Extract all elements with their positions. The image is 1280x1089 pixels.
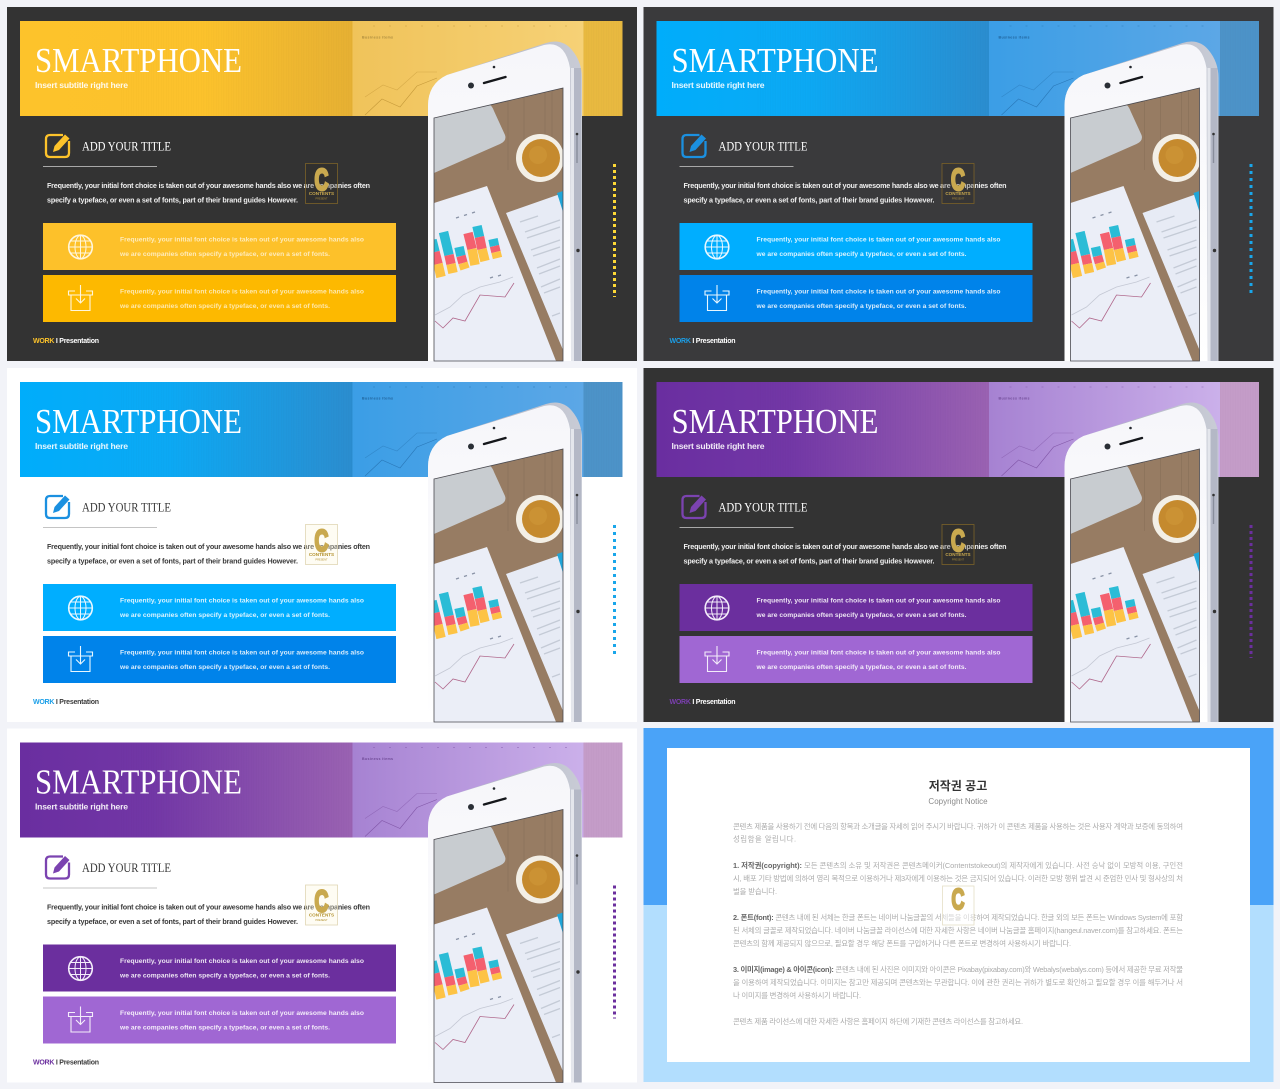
dotted line xyxy=(613,525,616,658)
title: SMARTPHONE xyxy=(35,762,242,802)
card 2 xyxy=(43,275,396,322)
watermark: PRESENT xyxy=(315,558,328,562)
watermark xyxy=(306,524,338,564)
icon: edit xyxy=(682,496,706,518)
card 2: we are companies often specify a typeface, or even a set of fonts. xyxy=(119,664,330,671)
phone xyxy=(425,403,582,722)
card 1: we are companies often specify a typeface, or even a set of fonts. xyxy=(756,612,967,619)
watermark: PRESENT xyxy=(952,558,965,562)
body paragraph: Frequently, your initial font choice is taken out of your awesome hands also we are companies often xyxy=(47,902,370,912)
body paragraph xyxy=(47,542,370,566)
card 2: Frequently, your initial font choice is taken out of your awesome hands also xyxy=(120,650,364,656)
icon: edit xyxy=(46,496,70,518)
card 2: Frequently, your initial font choice is taken out of your awesome hands also xyxy=(120,288,364,296)
body paragraph xyxy=(684,181,1006,204)
card 1: we are companies often specify a typeface, or even a set of fonts. xyxy=(119,251,330,258)
notice subtitle: Copyright Notice xyxy=(928,797,988,806)
subtitle: Insert subtitle right here xyxy=(672,441,765,451)
card 1 xyxy=(680,223,1032,270)
header banner: Business items xyxy=(998,36,1030,40)
card 1 xyxy=(43,944,396,992)
section heading: ADD YOUR TITLE xyxy=(718,140,808,154)
card 1: Frequently, your initial font choice is taken out of your awesome hands also xyxy=(120,236,364,244)
watermark: PRESENT xyxy=(315,196,328,200)
subtitle: Insert subtitle right here xyxy=(35,80,128,90)
notice body: 콘텐츠의 함께 제공되지 않으므로, 필요할 경우 해당 폰트를 구입하거나 다른 폰트로 변경하여 사용하시기 바랍니다. xyxy=(733,939,1071,948)
card 2 xyxy=(680,275,1032,322)
card 1 xyxy=(680,584,1032,631)
header banner: Business items xyxy=(362,36,393,40)
body paragraph: Frequently, your initial font choice is taken out of your awesome hands also we are companies often xyxy=(47,181,370,190)
section heading: ADD YOUR TITLE xyxy=(718,500,808,514)
phone xyxy=(425,763,582,1082)
slide 4: purple on dark xyxy=(644,368,1274,722)
body paragraph: Frequently, your initial font choice is taken out of your awesome hands also we are companies often xyxy=(684,542,1006,551)
notice body: 콘텐츠 제품 라이선스에 대한 자세한 사항은 홈페이지 하단에 기재한 콘텐츠 라이선스를 참고하세요. xyxy=(733,1017,1023,1026)
notice body: 3. 이미지(image) & 아이콘(icon): 콘텐츠 내에 된 사진은 이미지와 아이콘은 Pixabay(pixabay.com)와 Webalys(webalys.com) 등에서 제공한 무료 저작물 xyxy=(733,965,1183,974)
footer: WORK I Presentation xyxy=(33,699,99,706)
card 1: Frequently, your initial font choice is taken out of your awesome hands also xyxy=(756,598,1000,604)
dotted line xyxy=(1250,164,1252,297)
subtitle: Insert subtitle right here xyxy=(35,802,128,812)
card 2: we are companies often specify a typeface, or even a set of fonts. xyxy=(756,303,967,310)
title: SMARTPHONE xyxy=(35,402,242,441)
watermark: C xyxy=(952,884,964,916)
section heading: ADD YOUR TITLE xyxy=(82,140,171,154)
phone xyxy=(1062,42,1218,361)
body paragraph: Frequently, your initial font choice is taken out of your awesome hands also we are companies often xyxy=(684,181,1006,190)
subtitle: Insert subtitle right here xyxy=(672,80,765,90)
body paragraph: specify a typeface, or even a set of fonts, part of their brand guides However. xyxy=(47,196,298,204)
footer: WORK I Presentation xyxy=(33,1060,99,1066)
dotted line xyxy=(613,164,616,297)
watermark: C xyxy=(315,164,328,197)
card 2: we are companies often specify a typeface, or even a set of fonts. xyxy=(119,303,330,310)
watermark: CONTENTS xyxy=(309,552,334,557)
notice body: 2. 폰트(font): 콘텐츠 내에 된 서체는 한글 폰트는 네이버 나눔글꼴의 서체들을 이용하여 제작되었습니다. 한글 외의 보든 폰트는 Windows System에 포함 xyxy=(733,913,1183,922)
watermark: PRESENT xyxy=(952,196,965,200)
dotted line xyxy=(1250,525,1252,658)
card 2: we are companies often specify a typeface, or even a set of fonts. xyxy=(756,664,967,671)
notice body: 나 이미지를 변경하여 사용하시기 바랍니다. xyxy=(733,991,861,1000)
icon: edit xyxy=(46,856,70,878)
card 1: Frequently, your initial font choice is taken out of your awesome hands also xyxy=(120,958,364,965)
notice body: 콘텐츠 제품을 사용하기 전에 다음의 항목과 소개글을 자세히 읽어 주시기 바랍니다. 귀하가 이 콘텐츠 제품을 사용하는 것은 사용자 계약과 보증에 동의하여 xyxy=(733,822,1183,831)
title: SMARTPHONE xyxy=(672,402,878,441)
card 2 xyxy=(680,636,1032,683)
slide 6: copyright notice xyxy=(644,728,1274,1082)
watermark xyxy=(942,884,974,925)
section heading: ADD YOUR TITLE xyxy=(82,500,171,514)
header banner xyxy=(656,21,1259,116)
watermark xyxy=(306,885,338,925)
footer: WORK I Presentation xyxy=(33,338,99,345)
notice body xyxy=(733,822,1183,1026)
body paragraph xyxy=(47,902,370,926)
phone xyxy=(425,42,582,361)
dotted line xyxy=(613,886,616,1018)
watermark xyxy=(942,524,974,564)
card 1 xyxy=(43,223,396,270)
slide 3: blue on white xyxy=(7,368,637,722)
header banner: Business items xyxy=(998,396,1030,400)
body paragraph: specify a typeface, or even a set of fonts, part of their brand guides However. xyxy=(47,556,298,566)
icon: edit xyxy=(682,134,706,157)
slide 2: blue on dark xyxy=(644,7,1274,361)
watermark: CONTENTS xyxy=(309,912,334,918)
watermark: C xyxy=(315,525,328,558)
title: SMARTPHONE xyxy=(672,41,878,80)
header banner xyxy=(656,382,1259,477)
watermark: C xyxy=(951,525,965,558)
notice body: 1. 저작권(copyright): 모든 콘텐츠의 소유 및 저작권은 콘텐츠메이커(Contentstokeout)의 제작자에게 있습니다. 사전 승낙 없이 모방적 이용, 구인전 xyxy=(733,861,1183,870)
body paragraph: specify a typeface, or even a set of fonts, part of their brand guides However. xyxy=(684,196,934,204)
notice title: 저작권 공고 xyxy=(929,778,987,793)
watermark: C xyxy=(315,885,328,919)
footer: WORK I Presentation xyxy=(670,338,736,345)
card 2 xyxy=(43,996,396,1044)
icon: edit xyxy=(46,134,70,157)
watermark: CONTENTS xyxy=(309,191,334,196)
watermark: C xyxy=(951,164,965,197)
card 1 xyxy=(43,584,396,631)
card 2 xyxy=(43,636,396,683)
card 2: Frequently, your initial font choice is taken out of your awesome hands also xyxy=(756,650,1000,656)
body paragraph xyxy=(684,542,1006,566)
card 1: we are companies often specify a typeface, or even a set of fonts. xyxy=(119,972,330,980)
header banner xyxy=(20,21,622,116)
watermark: PRESENT xyxy=(315,918,328,922)
title: SMARTPHONE xyxy=(35,41,242,80)
card 2: Frequently, your initial font choice is taken out of your awesome hands also xyxy=(120,1010,364,1017)
watermark xyxy=(306,164,338,204)
subtitle: Insert subtitle right here xyxy=(35,441,128,451)
slide 1: yellow on dark xyxy=(7,7,637,361)
slide 5: purple on white xyxy=(7,728,637,1082)
card 1: Frequently, your initial font choice is taken out of your awesome hands also xyxy=(756,236,1000,244)
watermark: CONTENTS xyxy=(945,552,971,557)
card 2: we are companies often specify a typeface, or even a set of fonts. xyxy=(119,1024,330,1032)
header banner xyxy=(20,382,622,477)
notice body: 벌을 받습니다. xyxy=(733,887,777,896)
watermark xyxy=(942,164,974,204)
body paragraph xyxy=(47,181,370,204)
header banner: Business items xyxy=(362,757,393,761)
card 1: we are companies often specify a typeface, or even a set of fonts. xyxy=(756,251,967,258)
section heading: ADD YOUR TITLE xyxy=(82,861,171,875)
body paragraph: specify a typeface, or even a set of fonts, part of their brand guides However. xyxy=(684,556,934,566)
card 2: Frequently, your initial font choice is taken out of your awesome hands also xyxy=(756,288,1000,296)
card 1: we are companies often specify a typeface, or even a set of fonts. xyxy=(119,612,330,619)
watermark: CONTENTS xyxy=(945,191,971,196)
notice body: 된 서체의 글꼴로 제작되었습니다. 네이버 나눔글꼴 라이선스에 대한 자세한 사항은 네이버 나눔글꼴 홈페이지(hangeul.naver.com)를 참고하세요. 폰트는 xyxy=(733,926,1183,935)
header banner: Business items xyxy=(362,396,393,400)
card 1: Frequently, your initial font choice is taken out of your awesome hands also xyxy=(120,598,364,604)
notice body: 을 이용하여 제작되었습니다. 이미지는 참고만 제공되며 콘텐츠와는 무관합니다. 이에 관한 권리는 귀하가 별도로 확인하고 필요할 경우 이를 해두거나 서 xyxy=(733,978,1183,987)
notice body: 시, 배포 기타 방법에 의하여 영리 목적으로 이용하거나 제3자에게 이용하는 것은 금지되어 있습니다. 이러한 모방 행위 발견 시 준엄한 민사 및 형사상의 처 xyxy=(733,874,1183,883)
phone xyxy=(1062,403,1218,722)
body paragraph: Frequently, your initial font choice is taken out of your awesome hands also we are companies often xyxy=(47,542,370,551)
header banner xyxy=(20,742,622,838)
notice body: 성립함을 알립니다. xyxy=(733,834,796,844)
body paragraph: specify a typeface, or even a set of fonts, part of their brand guides However. xyxy=(47,917,298,926)
footer: WORK I Presentation xyxy=(670,699,736,706)
